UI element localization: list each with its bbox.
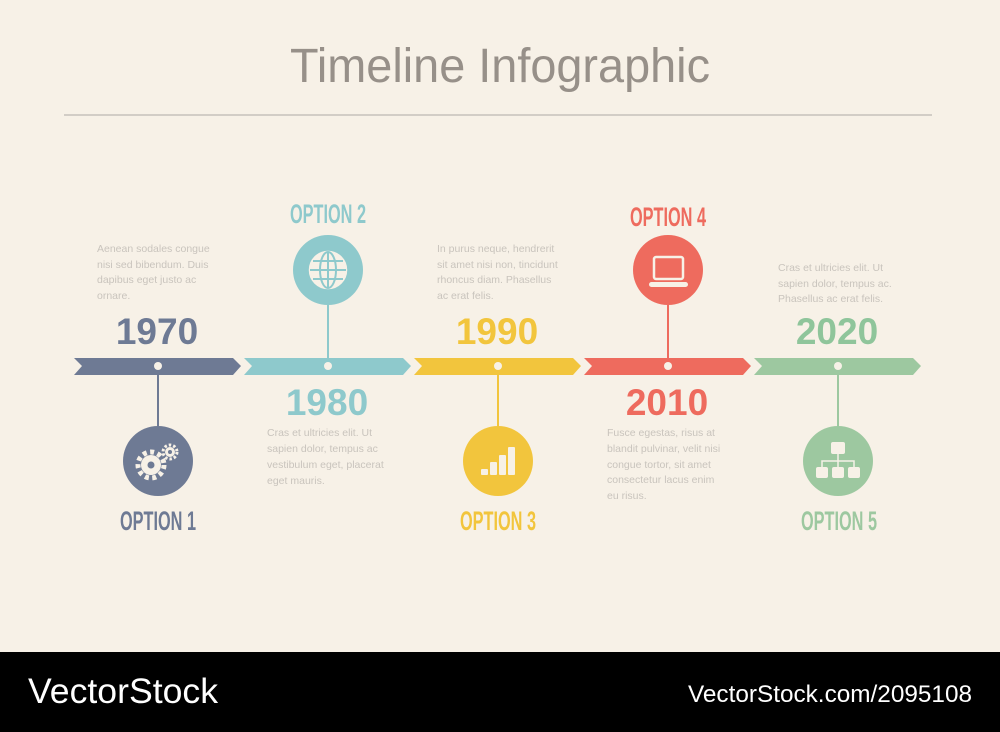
item 1970: nisi sed bibendum. Duis [97, 259, 208, 271]
item 1980: Cras et ultricies elit. Ut [267, 427, 372, 439]
title: Timeline Infographic [290, 40, 710, 93]
item 2010 [607, 202, 720, 502]
item 1990: OPTION 3 [460, 506, 536, 536]
item 1980: eget mauris. [267, 475, 325, 487]
item 2020 [778, 262, 892, 536]
item 2020: OPTION 5 [801, 506, 877, 536]
item 1990: rhoncus diam. Phasellus [437, 274, 551, 286]
item 1970: dapibus eget justo ac [97, 274, 196, 286]
item 1980: OPTION 2 [290, 199, 366, 229]
item 2010: Fusce egestas, risus at [607, 427, 715, 439]
item 1970: 1970 [116, 311, 198, 352]
icon: bar chart [481, 447, 515, 475]
item 1980: 1980 [286, 382, 368, 423]
item 2020: sapien dolor, tempus ac. [778, 278, 892, 290]
item 2020: Phasellus ac erat felis. [778, 293, 883, 305]
icon: org chart [816, 442, 860, 478]
item 2020: Cras et ultricies elit. Ut [778, 262, 883, 274]
item 1990: 1990 [456, 311, 538, 352]
item 2010: eu risus. [607, 490, 647, 502]
item 1980: vestibulum eget, placerat [267, 459, 384, 471]
item 1990: sit amet nisi non, tincidunt [437, 259, 558, 271]
item 1990 [437, 243, 558, 536]
item 1970: OPTION 1 [120, 506, 196, 536]
item 1970 [97, 243, 210, 536]
icon: gears [138, 445, 177, 478]
footer: VectorStock [28, 672, 219, 711]
item 1990: ac erat felis. [437, 290, 494, 302]
item 2010: blandit pulvinar, velit nisi [607, 443, 720, 455]
footer: VectorStock.com/2095108 [688, 681, 972, 708]
timeline bar [74, 358, 921, 375]
footer [0, 652, 1000, 732]
item 1980 [267, 199, 384, 487]
item 1990: In purus neque, hendrerit [437, 243, 554, 255]
item 2010: consectetur lacus enim [607, 474, 715, 486]
item 1970: Aenean sodales congue [97, 243, 210, 255]
item 2010: 2010 [626, 382, 708, 423]
icon: globe [310, 252, 346, 288]
icon: laptop [649, 257, 688, 287]
item 2010: OPTION 4 [630, 202, 706, 232]
item 2020: 2020 [796, 311, 878, 352]
item 1970: ornare. [97, 290, 130, 302]
item 2010: congue tortor, sit amet [607, 459, 711, 471]
item 1980: sapien dolor, tempus ac [267, 443, 378, 455]
